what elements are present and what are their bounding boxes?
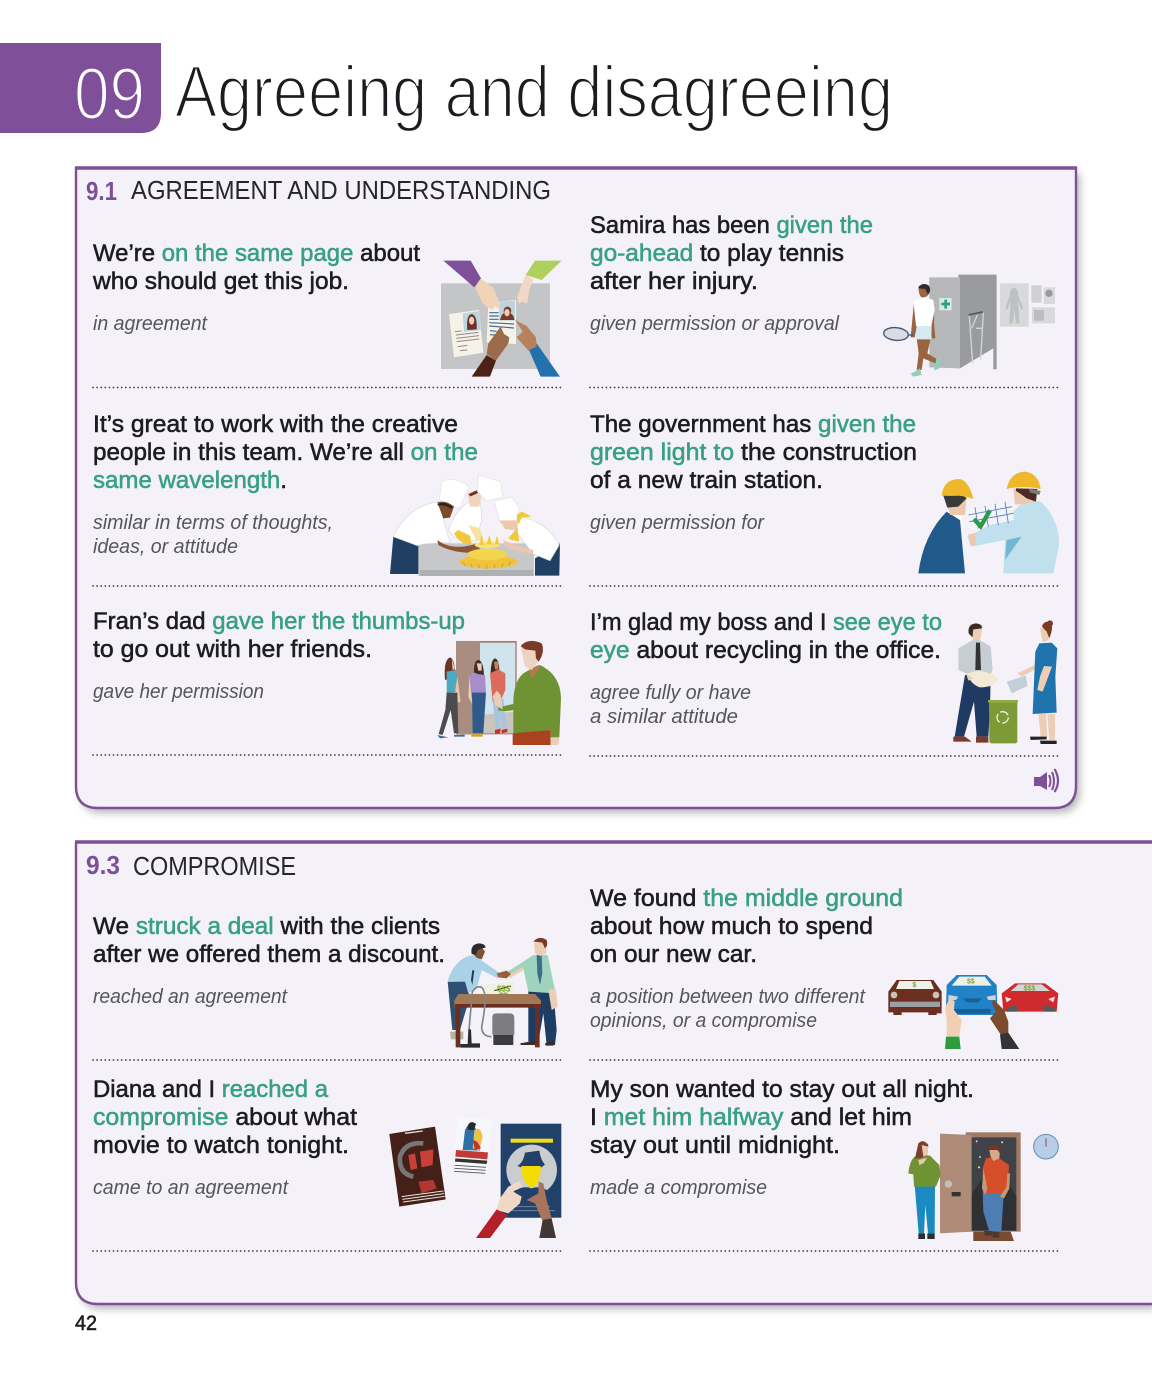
definition: agree fully or have (590, 681, 751, 704)
entry: gave her the thumbs-up (93, 608, 561, 745)
icon: hands choosing movie posters (389, 1116, 561, 1238)
example sentence: The government has given the (590, 411, 916, 438)
entry: on the same wavelength (93, 411, 560, 576)
icon: two engineers checking a plan (918, 472, 1059, 573)
entry: met him halfway (590, 1076, 1058, 1241)
definition: similar in terms of thoughts, (93, 511, 333, 534)
example sentence: It’s great to work with the creative (93, 411, 458, 438)
page number: 42 (75, 1312, 97, 1335)
heading 9.3 (86, 850, 296, 881)
entry: given the go-ahead (590, 212, 1055, 377)
panel: 9.1 agreement and understanding (75, 168, 1077, 808)
example sentence: of a new train station. (590, 467, 823, 494)
example sentence: movie to watch tonight. (93, 1132, 349, 1159)
example sentence (590, 1076, 974, 1159)
example sentence: eye about recycling in the office. (590, 637, 941, 664)
example sentence: same wavelength. (93, 467, 287, 494)
icon: handshake over vacuum price (448, 938, 558, 1048)
definition: reached an agreement (93, 985, 288, 1008)
example sentence: Fran’s dad gave her the thumbs-up (93, 608, 465, 635)
example sentence (590, 411, 917, 494)
example sentence (92, 240, 420, 295)
example sentence (93, 913, 445, 968)
example sentence: We struck a deal with the clients (93, 913, 440, 940)
definition: given permission for (590, 511, 765, 534)
example sentence (93, 608, 465, 663)
icon: tennis player leaving medical room (883, 275, 1055, 377)
icon: hands pointing at three priced cars (888, 975, 1058, 1049)
panel: 9.3 compromise (75, 842, 1152, 1304)
example sentence (93, 1076, 357, 1159)
definition: opinions, or a compromise (590, 1009, 817, 1032)
entry: struck a deal (93, 913, 558, 1048)
example sentence: go-ahead to play tennis (590, 240, 844, 267)
example sentence: people in this team. We’re all on the (93, 439, 478, 466)
definition: came to an agreement (93, 1176, 289, 1199)
definition: gave her permission (93, 680, 264, 703)
example sentence: about how much to spend (590, 913, 873, 940)
example sentence: Samira has been given the (590, 212, 873, 239)
dividers (93, 388, 1060, 756)
entry: see eye to eye (590, 609, 1057, 744)
example sentence: We’re on the same page about (93, 240, 420, 267)
icon: handshake over vacuum price: $$ (499, 992, 508, 1001)
example sentence: to go out with her friends. (93, 636, 372, 663)
entry: on the same page (92, 240, 562, 377)
definition: made a compromise (590, 1176, 767, 1199)
example sentence: Diana and I reached a (93, 1076, 328, 1103)
example sentence: I met him halfway and let him (590, 1104, 912, 1131)
example sentence: who should get this job. (92, 268, 349, 295)
example sentence: after her injury. (590, 268, 758, 295)
example sentence: We found the middle ground (590, 885, 903, 912)
chapter number tab (0, 43, 161, 135)
example sentence: I’m glad my boss and I see eye to (590, 609, 942, 636)
definition: ideas, or attitude (93, 535, 238, 558)
heading 9.1: 9.1 (86, 176, 117, 206)
example sentence: green light to the construction (590, 439, 917, 466)
title: Agreeing and disagreeing (175, 52, 893, 133)
definition: a position between two different (590, 985, 866, 1008)
example sentence: compromise about what (93, 1104, 357, 1131)
definition: in agreement (93, 312, 208, 335)
example sentence (93, 411, 478, 494)
icon: audio speaker (1034, 769, 1058, 792)
definition: given permission or approval (590, 312, 840, 335)
example sentence: on our new car. (590, 941, 757, 968)
icon: colleagues recycling paper (953, 620, 1057, 744)
heading 9.3: COMPROMISE (133, 853, 296, 881)
example sentence (590, 212, 873, 295)
example sentence (590, 609, 942, 664)
definition (590, 985, 866, 1032)
definition: a similar attitude (590, 705, 738, 728)
example sentence: after we offered them a discount. (93, 941, 445, 968)
definition (590, 681, 751, 728)
example sentence: stay out until midnight. (590, 1132, 840, 1159)
example sentence (590, 885, 903, 968)
icon: three chefs decorating a cake (390, 475, 560, 576)
icon: handshake over vacuum price: $$$ (497, 984, 511, 993)
icon: hands choosing between CVs (441, 261, 562, 377)
icon: hands pointing at three priced cars: $ (912, 980, 916, 989)
heading 9.1: AGREEMENT AND UNDERSTANDING (131, 177, 551, 205)
dividers (93, 1060, 1060, 1251)
chapter number tab: 09 (74, 54, 145, 135)
definition (93, 511, 333, 558)
entry: the middle ground (590, 885, 1058, 1049)
entry: reached a compromise (93, 1076, 561, 1238)
icon: mother and son at door with clock (908, 1132, 1058, 1241)
entry: given the green light to (590, 411, 1059, 573)
heading 9.3: 9.3 (86, 850, 120, 880)
icon: father giving thumbs-up to girls (437, 641, 561, 745)
icon: hands pointing at three priced cars: $$ (967, 979, 975, 986)
example sentence: My son wanted to stay out all night. (590, 1076, 974, 1103)
icon: hands pointing at three priced cars: $$$ (1024, 985, 1035, 992)
